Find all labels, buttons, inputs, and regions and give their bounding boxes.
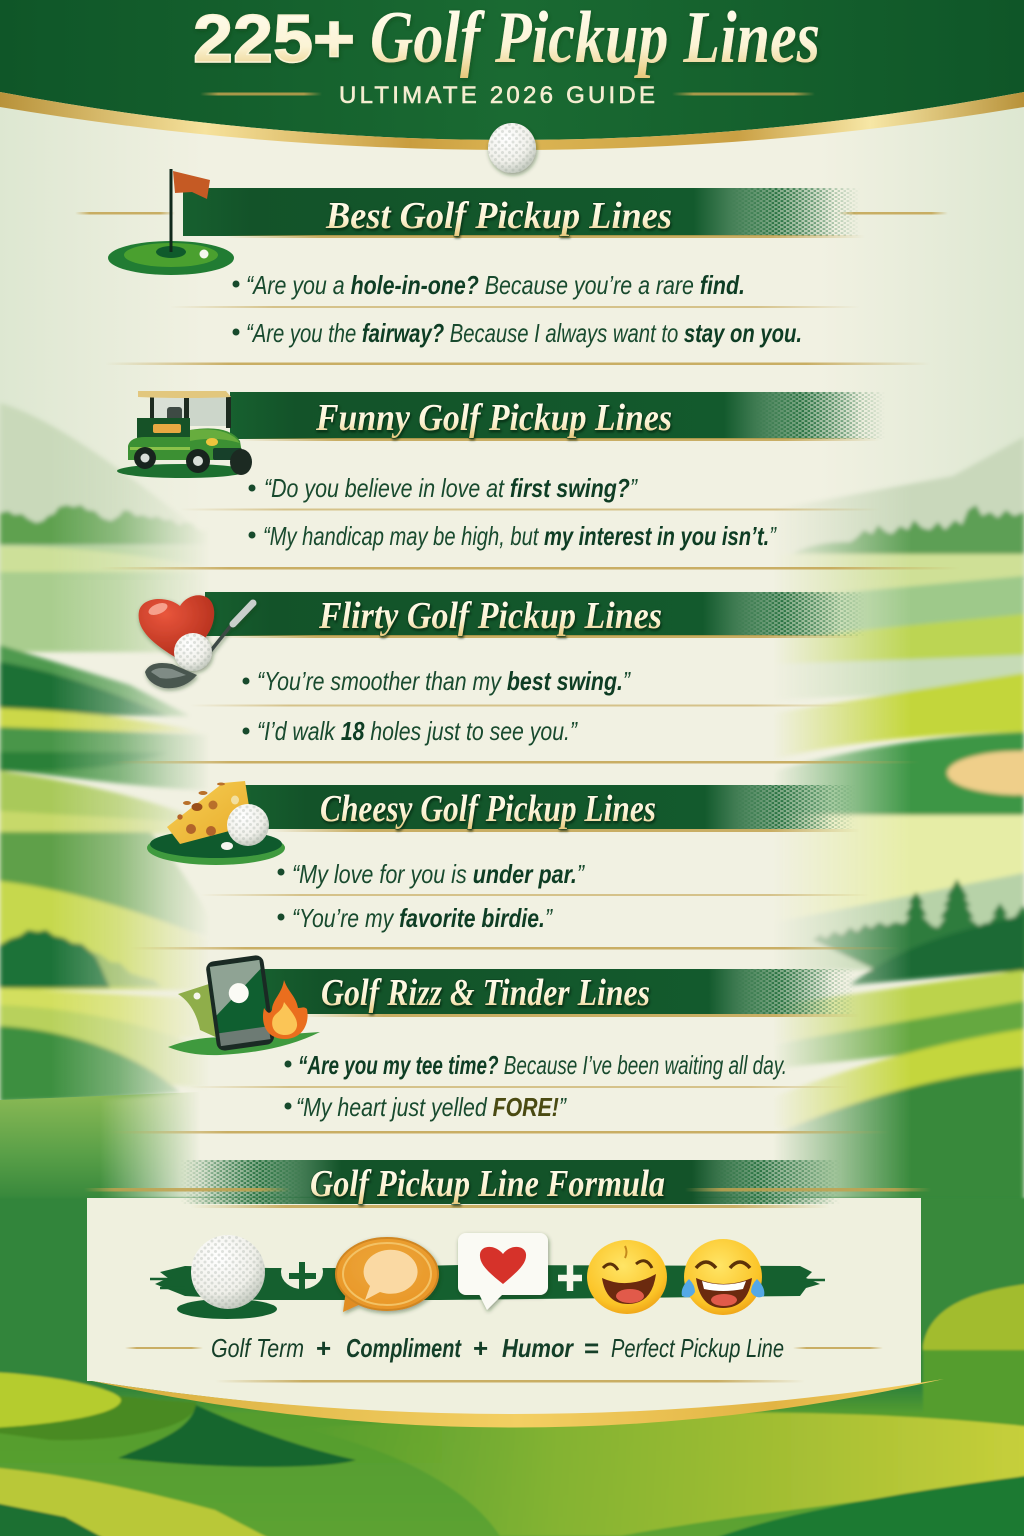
icon: tears of joy face	[682, 1239, 764, 1315]
banner	[230, 392, 885, 441]
banner	[205, 592, 865, 638]
heading: Golf Rizz & Tinder Lines	[321, 972, 650, 1014]
banner	[180, 1160, 840, 1208]
line 1: “Are you my tee time? Because I’ve been waiting all day.	[298, 1050, 787, 1080]
heading: Golf Pickup Line Formula	[310, 1163, 665, 1205]
banner	[183, 188, 865, 238]
section: best pickup lines	[75, 169, 948, 365]
icon: golf ball on header	[488, 123, 536, 173]
lower-left green wash	[0, 1092, 200, 1204]
formula equation: Perfect Pickup Line	[611, 1333, 784, 1363]
heading: Best Golf Pickup Lines	[325, 195, 672, 237]
brush stripe	[150, 1265, 825, 1300]
line 1: “Are you a hole-in-one? Because you’re a rare find.	[246, 270, 745, 300]
formula equation: Humor	[502, 1333, 575, 1363]
left landscape bands	[0, 403, 203, 1100]
panel background	[87, 1198, 921, 1415]
plus	[281, 1255, 323, 1291]
icon: heart, ball and club	[139, 595, 253, 688]
line 1: “You’re smoother than my best swing.”	[257, 666, 631, 696]
icon: cheese and ball	[147, 781, 285, 865]
icon: heart card	[458, 1233, 548, 1310]
subtitle	[200, 82, 815, 109]
subtitle: ULTIMATE 2026 GUIDE	[339, 82, 655, 109]
heading: Cheesy Golf Pickup Lines	[320, 788, 656, 830]
line 1: “My love for you is under par.”	[292, 859, 585, 889]
icon: golf cart	[117, 391, 252, 478]
formula equation: +	[316, 1333, 331, 1363]
formula equation: =	[584, 1333, 599, 1363]
formula equation: +	[473, 1333, 488, 1363]
section: funny pickup lines	[100, 391, 960, 570]
heading: Funny Golf Pickup Lines	[315, 397, 672, 439]
line 2: “You’re my favorite birdie.”	[292, 903, 553, 933]
line 2: “I’d walk 18 holes just to see you.”	[257, 716, 578, 746]
formula equation: Golf Term	[211, 1333, 304, 1363]
line 2: “My handicap may be high, but my interest in you isn’t.”	[263, 521, 777, 551]
banner	[260, 969, 860, 1017]
icon: laughing face	[587, 1240, 667, 1314]
line 2: “My heart just yelled FORE!”	[296, 1092, 567, 1122]
formula equation	[125, 1333, 883, 1363]
plus	[558, 1265, 582, 1291]
line 1: “Do you believe in love at first swing?”	[264, 473, 638, 503]
icon: flag on green	[108, 169, 234, 275]
section: flirty pickup lines	[110, 592, 920, 764]
line 2: “Are you the fairway? Because I always want to stay on you.	[246, 318, 802, 348]
header band	[0, 0, 1024, 150]
main title: 225+	[193, 1, 355, 77]
section: rizz and tinder lines	[110, 954, 890, 1134]
right landscape bands	[760, 437, 1024, 1204]
banner	[245, 785, 860, 832]
lower landscape	[0, 1198, 1024, 1536]
main title	[193, 0, 820, 79]
icon: golf ball	[177, 1235, 277, 1319]
section: cheesy pickup lines	[130, 781, 900, 950]
icon: phone and flame	[168, 954, 320, 1055]
formula equation: Compliment	[346, 1333, 462, 1363]
heading: Flirty Golf Pickup Lines	[318, 595, 662, 637]
section: formula panel	[84, 1160, 944, 1428]
gold arc	[92, 1379, 944, 1428]
icon: compliment speech bubble	[336, 1238, 438, 1312]
